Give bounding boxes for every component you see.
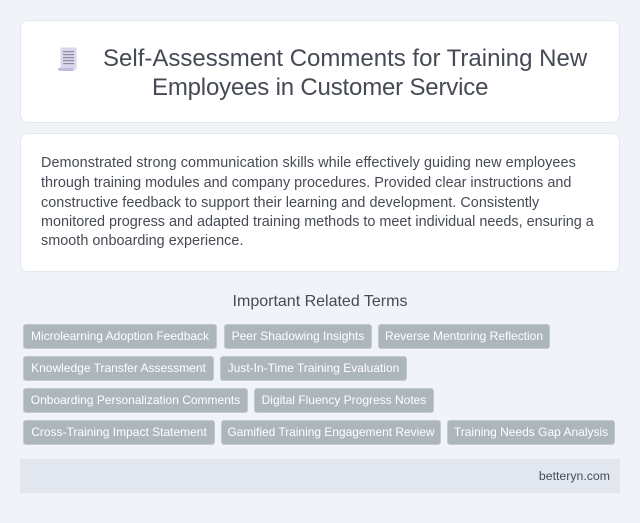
chip: [447, 420, 615, 445]
chip: [378, 324, 550, 349]
chip: Cross-Training Impact Statement: [31, 425, 207, 439]
chip: [220, 356, 407, 381]
chip: [23, 324, 217, 349]
text: paragraph line 1: Demonstrated strong communication skills while effectively guiding new employees: [41, 155, 576, 171]
text: paragraph line 3: constructive feedback to support their learning and development. Consistently: [41, 195, 539, 211]
footer bar: [20, 459, 620, 493]
title line 2: Employees in Customer Service: [152, 74, 488, 101]
chip: Onboarding Personalization Comments: [31, 393, 240, 407]
chip: [23, 388, 248, 413]
footer text: betteryn.com: [539, 469, 610, 483]
text: paragraph line 5: smooth onboarding experience.: [41, 233, 243, 249]
chip: Digital Fluency Progress Notes: [262, 393, 426, 407]
chip: Knowledge Transfer Assessment: [31, 361, 206, 375]
chip: Training Needs Gap Analysis: [454, 425, 608, 439]
chip: Gamified Training Engagement Review: [227, 425, 435, 439]
chip: [23, 356, 214, 381]
chip: Peer Shadowing Insights: [232, 329, 364, 343]
panel: summary paragraph: [20, 133, 620, 272]
chip: [224, 324, 372, 349]
chip: Just-In-Time Training Evaluation: [228, 361, 399, 375]
chip: [23, 420, 215, 445]
heading: related terms: Important Related Terms: [233, 293, 407, 310]
title line 1: Self-Assessment Comments for Training New: [103, 45, 587, 72]
chip: Reverse Mentoring Reflection: [385, 329, 543, 343]
chip: [221, 420, 441, 445]
text: paragraph line 4: monitored progress and adapted training methods to meet individual needs, ensuring a: [41, 214, 594, 230]
chip: Microlearning Adoption Feedback: [31, 329, 209, 343]
panel: title card: [20, 20, 620, 123]
icon: document receipt: [58, 48, 76, 71]
text: paragraph line 2: through training modules and company procedures. Provided clear instructions and: [41, 175, 571, 191]
chip: [254, 388, 434, 413]
